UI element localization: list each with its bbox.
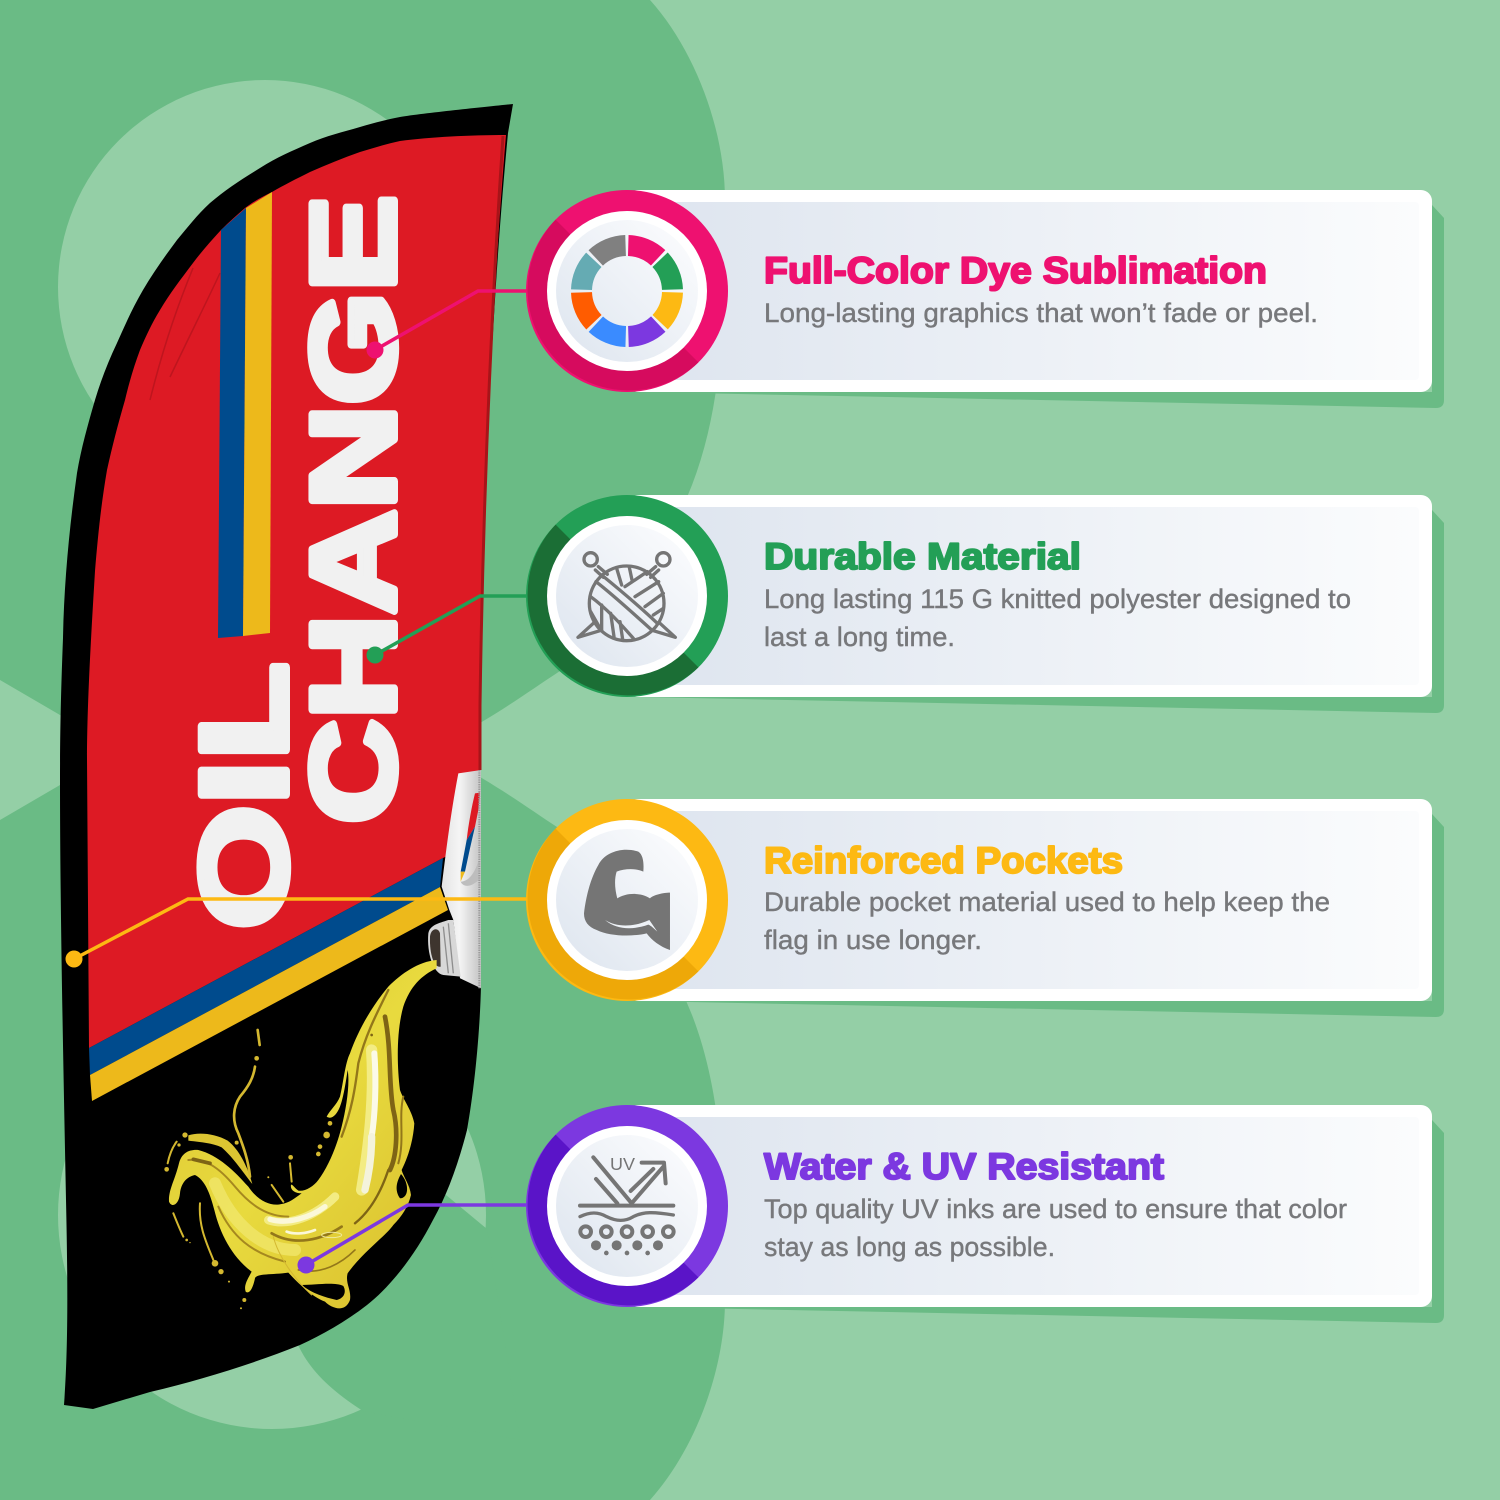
icon badge: color wheel	[526, 190, 728, 392]
card shadow	[640, 1120, 1444, 1323]
description: last a long time.	[764, 622, 955, 652]
diagonal blue stripe	[89, 858, 443, 1075]
description: Top quality UV inks are used to ensure that color	[764, 1194, 1347, 1224]
panel: water and uv resistant	[298, 1105, 1444, 1323]
flag red field	[87, 135, 506, 1048]
leader line	[298, 1205, 527, 1274]
leader line	[366, 291, 527, 358]
card	[627, 190, 1432, 392]
oil jug	[428, 770, 481, 988]
heading: Durable Material	[764, 536, 1081, 577]
card shadow	[640, 814, 1444, 1017]
card	[627, 1105, 1432, 1307]
card	[627, 495, 1432, 697]
description: Long lasting 115 G knitted polyester designed to	[764, 584, 1351, 614]
vertical yellow stripe	[243, 192, 272, 636]
icon badge: yarn ball	[526, 495, 728, 697]
flag text: oil: OIL	[176, 662, 314, 930]
icon badge: flexed arm	[526, 799, 728, 1001]
flag black sleeve and body	[60, 104, 513, 1409]
vertical blue stripe	[218, 208, 246, 638]
heading: Reinforced Pockets	[764, 840, 1123, 881]
description: Durable pocket material used to help keep the	[764, 887, 1330, 917]
leader line	[66, 899, 527, 968]
leader line	[366, 596, 527, 664]
heading: Water & UV Resistant	[764, 1146, 1164, 1187]
panel: full-color dye sublimation	[366, 190, 1444, 408]
panel: durable material	[366, 495, 1444, 713]
description: flag in use longer.	[764, 925, 982, 955]
description: Long-lasting graphics that won’t fade or peel.	[764, 298, 1318, 328]
card shadow	[640, 510, 1444, 713]
icon badge: uv protection	[526, 1105, 728, 1307]
card shadow	[640, 205, 1444, 408]
description	[764, 1194, 1347, 1262]
description	[764, 887, 1330, 955]
icon badge: uv protection: UV	[610, 1154, 635, 1174]
oil splash	[164, 960, 437, 1309]
feather flag	[60, 104, 513, 1409]
description: stay as long as possible.	[764, 1232, 1055, 1262]
description	[764, 584, 1351, 652]
card	[627, 799, 1432, 1001]
diagonal yellow stripe	[90, 887, 448, 1101]
panel: reinforced pockets	[66, 799, 1444, 1017]
flag text: change: CHANGE	[286, 195, 420, 824]
heading: Full-Color Dye Sublimation	[764, 250, 1267, 291]
